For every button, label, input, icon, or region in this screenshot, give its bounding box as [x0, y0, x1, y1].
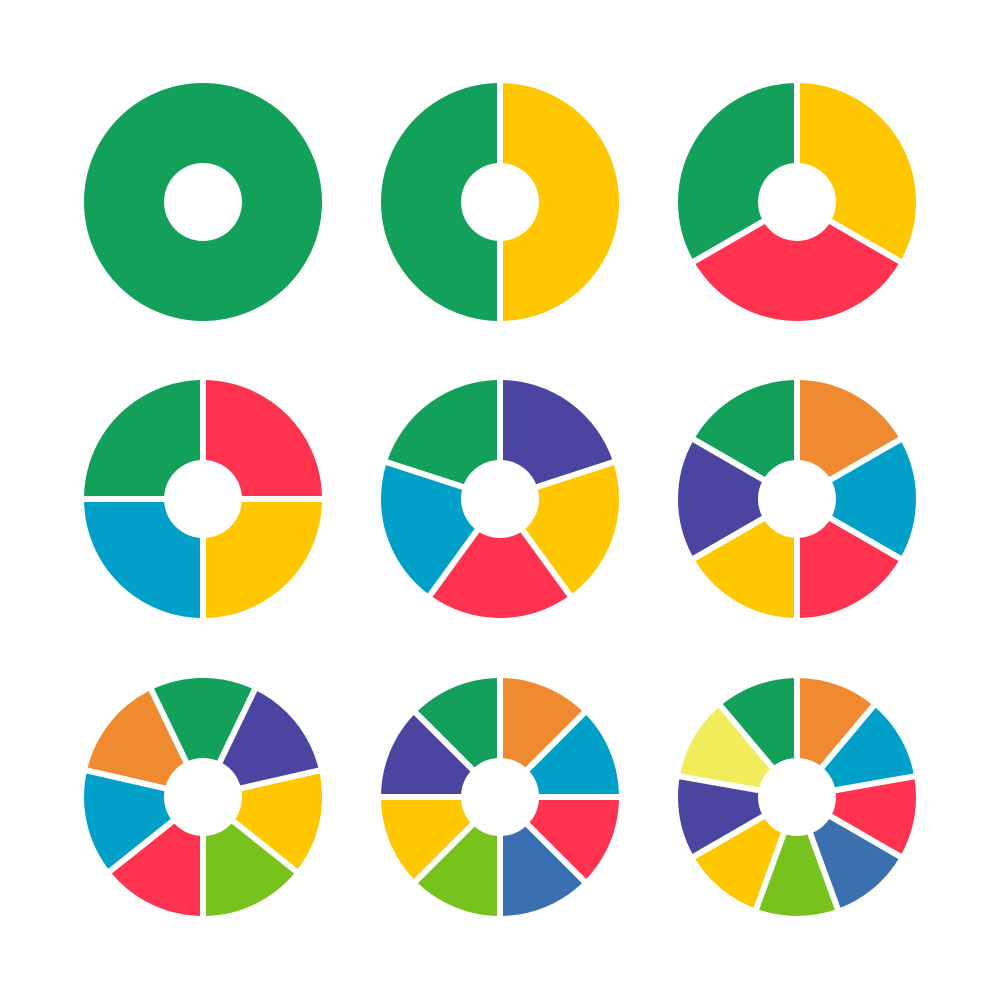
- donut chart: 8 segments: [375, 672, 625, 922]
- donut chart: 4 segments: [78, 374, 328, 624]
- donut chart: 9 segments: [674, 672, 920, 914]
- donut chart: 2 segments: [421, 77, 579, 327]
- donut chart: 5 segments: [381, 374, 619, 600]
- donut chart: 1 segment: [124, 123, 282, 281]
- donut chart: 7 segments: [81, 684, 325, 922]
- donut chart: 6 segments: [689, 374, 905, 624]
- donut chart: 3 segments: [689, 77, 905, 281]
